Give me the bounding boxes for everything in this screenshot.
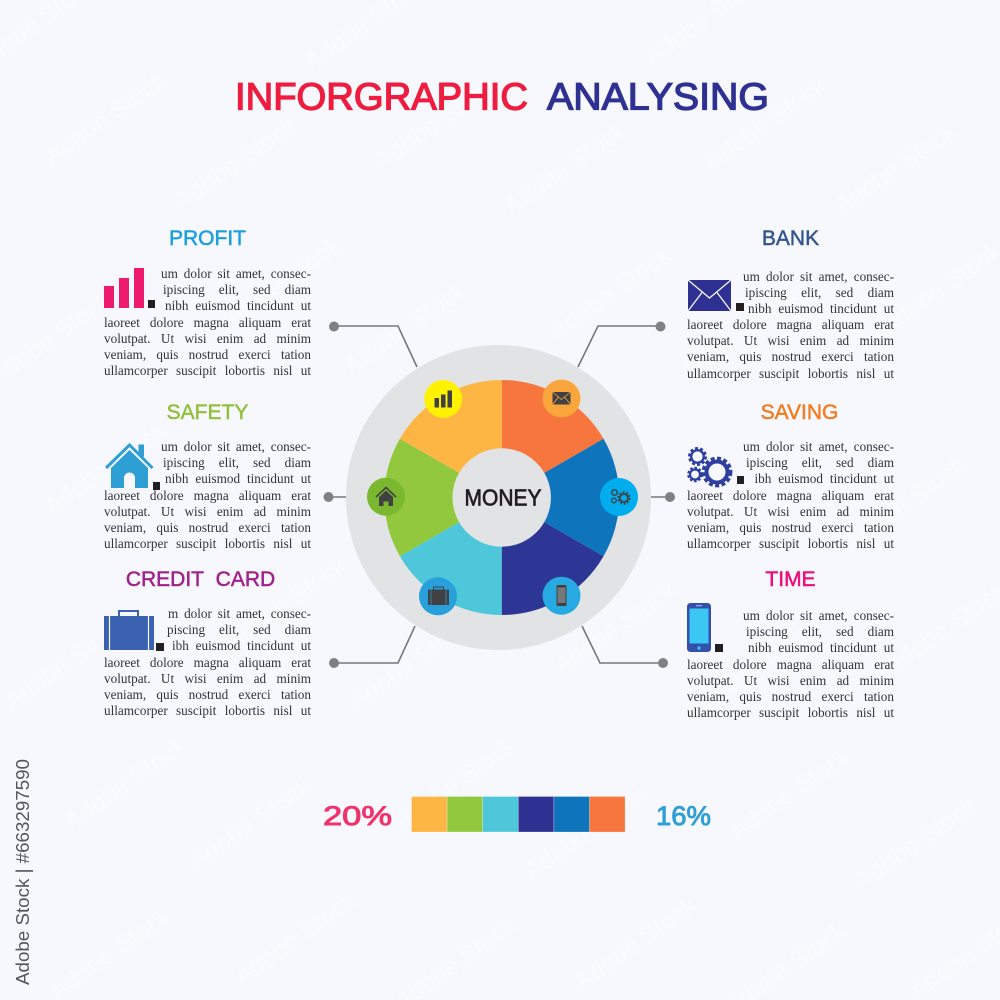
text block: ullamcorper suscipit lobortis nisl ut: [104, 536, 311, 551]
heading: saving: SAVING: [761, 401, 838, 424]
icon: smartphone: [687, 603, 711, 652]
watermark pattern: Adobe Stock: [699, 71, 832, 176]
text block: volutpat. Ut wisi enim ad minim: [104, 504, 311, 519]
text block: volutpat. Ut wisi enim ad minim: [687, 673, 894, 688]
text block: [104, 439, 311, 551]
icon: gears: [687, 447, 732, 488]
icon: house badge: [367, 478, 405, 516]
segment: time orange: [502, 380, 604, 498]
legend: percent bar: [323, 796, 711, 832]
text block: ullamcorper suscipit lobortis nisl ut: [687, 705, 894, 720]
watermark pattern: Adobe Stock: [679, 621, 812, 726]
watermark pattern: Adobe Stock: [499, 116, 632, 221]
icon: gears badge: [600, 478, 638, 516]
watermark pattern: Adobe Stock: [849, 791, 982, 896]
watermark pattern: Adobe Stock: [519, 781, 652, 886]
icon: bar chart: [104, 268, 144, 308]
panel: saving: [687, 401, 894, 551]
outer grey disc: [346, 345, 651, 650]
watermark pattern: Adobe Stock: [724, 741, 857, 846]
hub label: money: MONEY: [464, 484, 542, 510]
text block: ipiscing elit, sed diam: [746, 455, 894, 470]
text block: veniam, quis nostrud exerci tation: [104, 520, 311, 535]
panel: credit card: [104, 568, 311, 718]
heading: time: TIME: [765, 568, 816, 591]
segment: amber: [400, 380, 502, 498]
bullet square: [156, 643, 164, 651]
text block: veniam, quis nostrud exerci tation: [687, 689, 894, 704]
icon: envelope badge: [542, 380, 580, 418]
text block: laoreet dolore magna aliquam erat: [104, 655, 311, 670]
text block: laoreet dolore magna aliquam erat: [104, 488, 311, 503]
text block: laoreet dolore magna aliquam erat: [687, 657, 894, 672]
text block: um dolor sit amet, consec-: [743, 439, 894, 454]
stat: 20%: 20%: [323, 801, 392, 831]
title: INFORGRAPHIC: [235, 76, 528, 118]
text block: volutpat. Ut wisi enim ad minim: [104, 671, 311, 686]
segment: blue: [502, 439, 619, 556]
text block: um dolor sit amet, consec-: [743, 268, 894, 284]
watermark pattern: Adobe Stock: [229, 886, 362, 991]
text block: [104, 266, 311, 378]
icon: phone badge: [542, 577, 580, 615]
watermark pattern: Adobe Stock: [569, 891, 702, 996]
title: ANALYSING: [547, 76, 769, 118]
stock id caption: Adobe Stock | #663297590: [12, 759, 33, 985]
text block: veniam, quis nostrud exerci tation: [687, 520, 894, 535]
segment: green: [384, 439, 502, 556]
icon: briefcase badge: [419, 577, 457, 615]
text block: veniam, quis nostrud exerci tation: [687, 349, 894, 364]
watermark pattern: Adobe Stock: [339, 276, 472, 381]
panel: money wheel: [346, 345, 651, 650]
text block: ullamcorper suscipit lobortis nisl ut: [687, 366, 894, 381]
panel: profit: [104, 227, 311, 378]
watermark pattern: Adobe Stock: [369, 71, 502, 176]
text block: veniam, quis nostrud exerci tation: [104, 687, 311, 702]
icon: briefcase: [104, 610, 154, 650]
text block: nibh euismod tincidunt ut: [165, 471, 311, 486]
segment: cyan: [400, 498, 502, 615]
text block: veniam, quis nostrud exerci tation: [104, 347, 311, 362]
watermark pattern: Adobe Stock: [389, 731, 522, 836]
text block: ibh euismod tincidunt ut: [754, 471, 894, 486]
text block: [687, 439, 894, 551]
panel: time: [687, 568, 894, 720]
watermark pattern: Adobe Stock: [59, 731, 192, 836]
stat: 16%: 16%: [656, 801, 711, 831]
icon: bars badge: [424, 380, 462, 418]
text block: piscing elit, sed diam: [167, 622, 311, 637]
text block: ipiscing elit, sed diam: [746, 624, 894, 639]
text block: [687, 268, 894, 381]
watermark pattern: Adobe Stock: [674, 281, 807, 386]
heading: bank: BANK: [762, 227, 819, 250]
text block: ibh euismod tincidunt ut: [172, 638, 311, 653]
watermark pattern: Adobe Stock: [184, 771, 317, 876]
watermark pattern: Adobe Stock: [549, 576, 682, 681]
watermark pattern: Adobe Stock: [829, 116, 962, 221]
watermark pattern: Adobe Stock: [39, 66, 172, 171]
heading: profit: PROFIT: [169, 227, 246, 250]
bullet square: [715, 644, 722, 652]
text block: ullamcorper suscipit lobortis nisl ut: [687, 536, 894, 551]
watermark pattern: Adobe Stock: [39, 416, 172, 521]
panel: safety: [104, 401, 311, 551]
text block: nibh euismod tincidunt ut: [748, 301, 894, 316]
text block: um dolor sit amet, consec-: [161, 439, 311, 454]
bullet square: [737, 476, 744, 484]
centre hub: [452, 448, 551, 547]
watermark pattern: Adobe Stock: [544, 241, 677, 346]
text block: ipiscing elit, sed diam: [745, 285, 894, 300]
text block: [687, 608, 894, 720]
text block: um dolor sit amet, consec-: [161, 266, 311, 281]
text block: [104, 606, 311, 718]
text block: volutpat. Ut wisi enim ad minim: [687, 333, 894, 348]
text block: laoreet dolore magna aliquam erat: [104, 315, 311, 330]
text block: ipiscing elit, sed diam: [163, 455, 311, 470]
text block: ullamcorper suscipit lobortis nisl ut: [104, 703, 311, 718]
bullet square: [736, 303, 744, 311]
icon: house: [105, 442, 154, 488]
text block: laoreet dolore magna aliquam erat: [687, 488, 894, 503]
text block: um dolor sit amet, consec-: [743, 608, 894, 623]
heading: credit card: CREDIT CARD: [126, 568, 275, 591]
watermark pattern: Adobe Stock: [839, 451, 972, 556]
bullet square: [153, 482, 160, 490]
title: [235, 76, 769, 118]
colour swatches: [412, 796, 625, 832]
icon: envelope: [688, 280, 731, 311]
watermark pattern: Adobe Stock: [344, 611, 477, 716]
watermark pattern: Adobe Stock: [214, 231, 347, 336]
text block: laoreet dolore magna aliquam erat: [687, 317, 894, 332]
watermark pattern: Adobe Stock: [169, 111, 302, 216]
heading: safety: SAFETY: [167, 401, 248, 424]
text block: nibh euismod tincidunt ut: [165, 298, 311, 313]
text block: volutpat. Ut wisi enim ad minim: [104, 331, 311, 346]
text block: nibh euismod tincidunt ut: [748, 640, 894, 655]
text block: ipiscing elit, sed diam: [163, 282, 311, 297]
panel: bank: [687, 227, 894, 381]
watermark pattern: Adobe Stock: [0, 611, 132, 716]
bullet square: [148, 300, 155, 308]
text block: m dolor sit amet, consec-: [168, 606, 311, 621]
text block: volutpat. Ut wisi enim ad minim: [687, 504, 894, 519]
watermark pattern: Adobe Stock: [219, 551, 352, 656]
segment: navy: [502, 498, 604, 615]
text block: ullamcorper suscipit lobortis nisl ut: [104, 363, 311, 378]
